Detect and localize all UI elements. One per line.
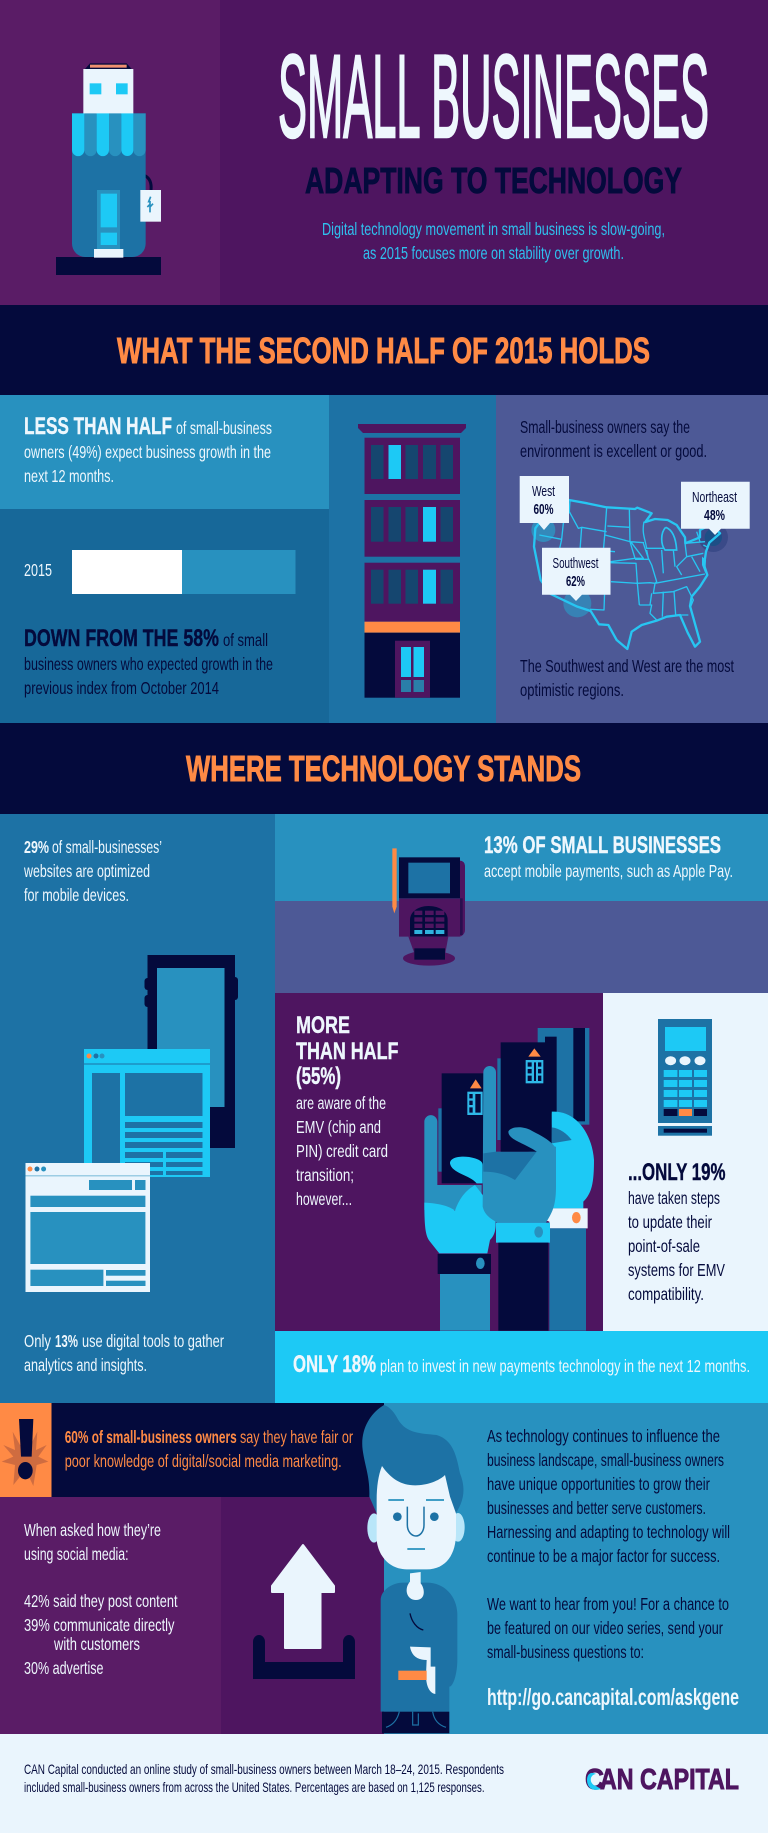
text block: analytics — [24, 1331, 224, 1375]
callout: Northeast — [681, 482, 750, 535]
icon: browser window cyan — [84, 1049, 210, 1177]
text block: less than half: next 12 months. — [24, 466, 114, 486]
text block: digital marketing knowledge: 60% of small-business owners — [65, 1427, 237, 1447]
icon: smartphone — [144, 955, 238, 1148]
text block: payments investment — [293, 1351, 750, 1378]
text block: digital marketing knowledge: poor knowledge of digital/social media marketing. — [65, 1451, 342, 1471]
text block: social media: When asked how they’re — [24, 1520, 161, 1540]
text block: methodology: CAN Capital conducted an online study of small-business owners between March 18–24, 2015. Respondents — [24, 1761, 504, 1777]
text block: only 19 percent: to update their — [628, 1212, 712, 1232]
icon: point-of-sale device — [658, 1019, 712, 1136]
text block: social media: 42% said they post content — [24, 1591, 178, 1611]
intro text — [322, 219, 665, 263]
panel: social media knowledge — [0, 1403, 384, 1497]
text block: more than half: THAN HALF — [296, 1038, 398, 1065]
logo: CAN Capital: C — [585, 1764, 604, 1796]
text block: more than half — [296, 1012, 398, 1209]
text block: only 19 percent — [628, 1159, 726, 1304]
text block: more than half: EMV (chip and — [296, 1117, 381, 1137]
text block: methodology — [24, 1761, 504, 1795]
illustration: business owner — [362, 1405, 465, 1733]
text block: down from: of small — [223, 630, 268, 650]
text block: optimistic regions: optimistic regions. — [520, 680, 624, 700]
text block: less than half: LESS THAN HALF — [24, 413, 172, 440]
text block: only 19 percent: compatibility. — [628, 1284, 704, 1304]
text block: more than half: however... — [296, 1189, 352, 1209]
callout: Northeast: 48% — [704, 507, 725, 524]
text block: only 19 percent: point-of-sale — [628, 1236, 700, 1256]
bar chart: 2015: 2015 — [24, 560, 52, 580]
text block: down from — [24, 625, 273, 698]
text block: closing — [487, 1426, 730, 1662]
text block: analytics: Only — [24, 1331, 51, 1351]
text block: more than half: transition; — [296, 1165, 354, 1185]
text block: mobile optimized: of small-businesses’ — [52, 837, 162, 857]
text block: payments investment: ONLY 18% — [293, 1351, 376, 1378]
text block: social media: with customers — [53, 1634, 140, 1654]
panel: building — [329, 395, 496, 723]
panel: websites and analytics — [0, 814, 275, 1403]
panel: only 18 percent — [275, 1331, 768, 1403]
icon: USB drive storefront — [56, 63, 161, 275]
text block: more than half: are aware of the — [296, 1093, 386, 1113]
text block: analytics: analytics and insights. — [24, 1355, 147, 1375]
callout: Southwest: 62% — [566, 573, 585, 590]
panel: section heading technology — [0, 723, 768, 814]
panel: social media use — [0, 1497, 384, 1734]
text block: analytics: use digital tools to gather — [82, 1331, 224, 1351]
text block: less than half: owners (49%) expect business growth in the — [24, 442, 271, 462]
text block: mobile optimized — [23, 837, 162, 905]
text block: more than half: (55%) — [296, 1063, 341, 1090]
text block: regional intro: Small-business owners say the — [520, 417, 690, 437]
intro text: as 2015 focuses more on stability over growth. — [363, 243, 624, 263]
text block: mobile optimized: for mobile devices. — [24, 885, 129, 905]
panel: only 19 percent — [603, 993, 768, 1331]
icon: hands holding cards — [424, 1028, 594, 1331]
text block: more than half: PIN) credit card — [296, 1141, 388, 1161]
callout: West — [520, 476, 569, 530]
panel: less than half — [0, 395, 329, 509]
panel: regional outlook — [496, 395, 768, 723]
text block: optimistic regions — [520, 656, 734, 700]
panel: closing message — [384, 1403, 768, 1734]
panel: down from 58 percent — [0, 509, 329, 723]
text block: social media — [24, 1520, 178, 1678]
icon: exclamation burst — [2, 1419, 48, 1486]
icon: building — [358, 424, 466, 698]
text block: mobile optimized: 29% — [24, 837, 49, 857]
text block: more than half: MORE — [296, 1012, 350, 1039]
panel: footer — [0, 1734, 768, 1833]
heading: WHERE TECHNOLOGY STANDS — [186, 748, 581, 789]
text block: digital marketing knowledge — [65, 1427, 353, 1471]
text block: social media: 30% advertise — [24, 1658, 104, 1678]
text block: down from: DOWN FROM THE 58% — [24, 625, 219, 652]
callout: Southwest: Southwest — [552, 555, 599, 572]
panel: mobile payments — [275, 814, 768, 993]
callout: Northeast: Northeast — [692, 489, 738, 506]
icon: browser window white — [26, 1163, 150, 1292]
text block: only 19 percent: ...ONLY 19% — [628, 1159, 726, 1186]
panel: EMV awareness — [275, 993, 603, 1331]
bar chart: 2015 — [24, 550, 296, 594]
callout: West: West — [532, 483, 556, 500]
text block: regional intro — [520, 417, 707, 461]
text block: only 19 percent: systems for EMV — [628, 1260, 725, 1280]
text block: less than half — [24, 413, 272, 486]
icon: payment terminal — [392, 848, 465, 966]
text block: mobile optimized: websites are optimized — [23, 861, 150, 881]
text block: down from: business owners who expected growth in the — [24, 654, 273, 674]
text block: social media: using social media: — [24, 1544, 128, 1564]
text block: only 19 percent: have taken steps — [628, 1188, 720, 1208]
text block: closing: small-business questions to: — [487, 1642, 644, 1662]
text block: down from: previous index from October 2014 — [24, 678, 219, 698]
text block: mobile payments — [484, 832, 733, 881]
text block: social media: 39% communicate directly — [24, 1615, 175, 1635]
text block: analytics: 13% — [55, 1331, 78, 1351]
callout: Southwest — [542, 548, 610, 601]
icon: upload arrow — [253, 1545, 355, 1679]
panel: header — [0, 0, 768, 305]
map: United States — [531, 500, 728, 649]
panel: section heading second half — [0, 305, 768, 395]
callout: West: 60% — [534, 501, 554, 518]
text block: methodology: included small-business owners from across the United States. Percentages are based on 1,125 responses. — [24, 1779, 484, 1795]
text block: less than half: of small-business — [176, 418, 272, 438]
text block: digital marketing knowledge: say they have fair or — [240, 1427, 353, 1447]
